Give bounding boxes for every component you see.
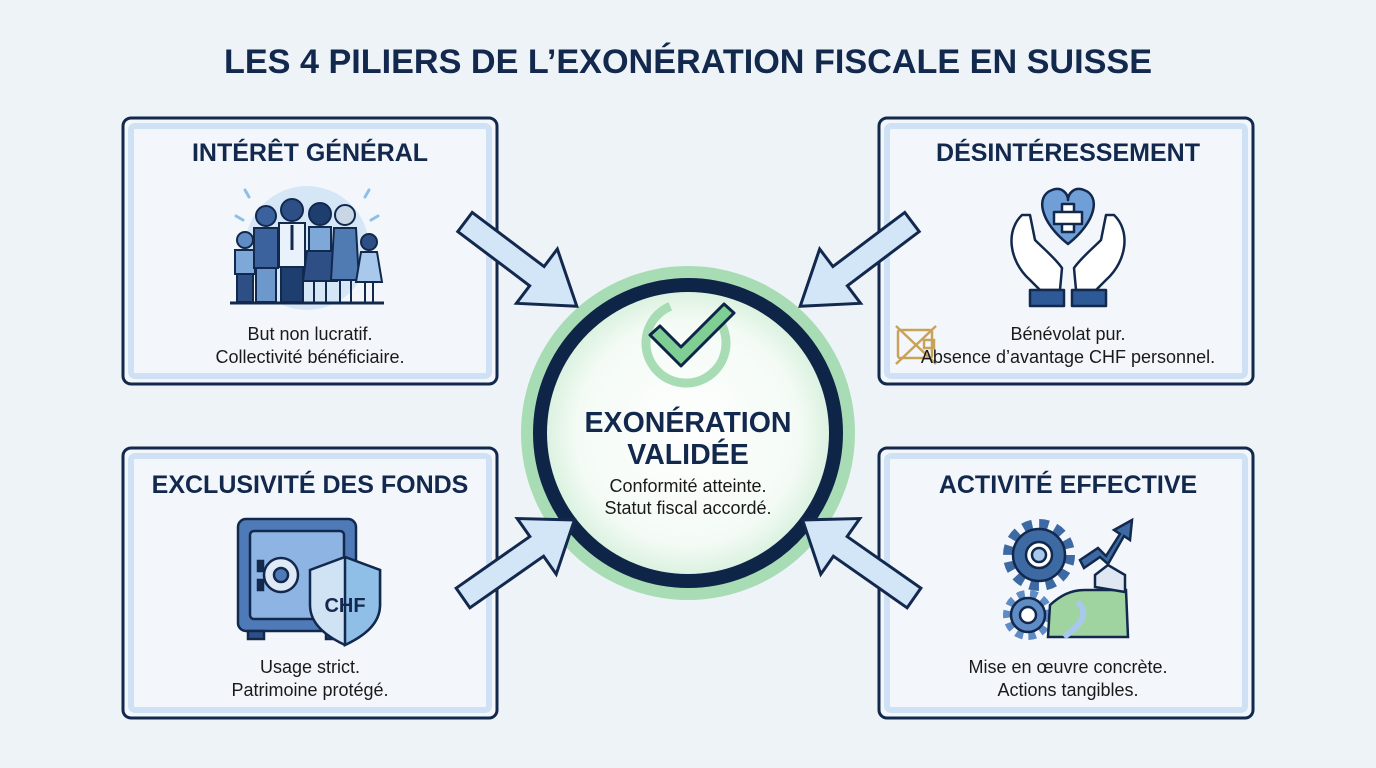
text: intérêt général: But non lucratif. bbox=[247, 324, 373, 344]
panel: intérêt général bbox=[123, 118, 497, 384]
icon: safe with CHF shield: CHF bbox=[324, 595, 366, 617]
icon: hands with heart bbox=[1012, 189, 1124, 306]
text: désintéressement: Bénévolat pur. bbox=[1010, 324, 1126, 344]
panel: activité effective bbox=[879, 448, 1253, 718]
heading: désintéressement: DÉSINTÉRESSEMENT bbox=[936, 138, 1200, 167]
central badge: exonération validée: Statut fiscal accordé. bbox=[604, 498, 772, 518]
text: exclusivité des fonds: Usage strict. bbox=[260, 657, 360, 677]
arrow: top-left bbox=[445, 195, 597, 333]
arrow: bottom-right bbox=[783, 492, 934, 626]
title: LES 4 PILIERS DE L’EXONÉRATION FISCALE EN SUISSE bbox=[224, 43, 1152, 81]
text: activité effective: Mise en œuvre concrète. bbox=[968, 657, 1168, 677]
panel: désintéressement: Absence d’avantage CHF personnel. bbox=[921, 347, 1215, 367]
panel: exclusivité des fonds: Patrimoine protégé. bbox=[231, 680, 389, 700]
text: badge heading: EXONÉRATION bbox=[585, 407, 791, 439]
icon: gears and growth bbox=[1008, 520, 1132, 637]
icon: check mark bbox=[630, 287, 742, 399]
heading: exclusivité des fonds: EXCLUSIVITÉ DES FONDS bbox=[152, 470, 468, 499]
panel: intérêt général: Collectivité bénéficiaire. bbox=[215, 347, 405, 367]
heading: intérêt général: INTÉRÊT GÉNÉRAL bbox=[192, 137, 428, 167]
icon: community people bbox=[230, 186, 384, 310]
text: badge subtitle: Conformité atteinte. bbox=[609, 476, 767, 496]
icon: crossed wallet bbox=[896, 326, 936, 364]
icon: safe with CHF shield bbox=[238, 519, 380, 645]
panel: activité effective: Actions tangibles. bbox=[997, 680, 1139, 700]
panel: exclusivité des fonds bbox=[123, 448, 497, 718]
heading: activité effective: ACTIVITÉ EFFECTIVE bbox=[939, 470, 1197, 499]
central badge: exonération validée: VALIDÉE bbox=[627, 439, 749, 471]
arrow: bottom-left bbox=[443, 492, 594, 626]
central badge: exonération validée bbox=[521, 266, 855, 600]
panel: désintéressement bbox=[879, 118, 1253, 384]
arrow: top-right bbox=[780, 195, 932, 333]
